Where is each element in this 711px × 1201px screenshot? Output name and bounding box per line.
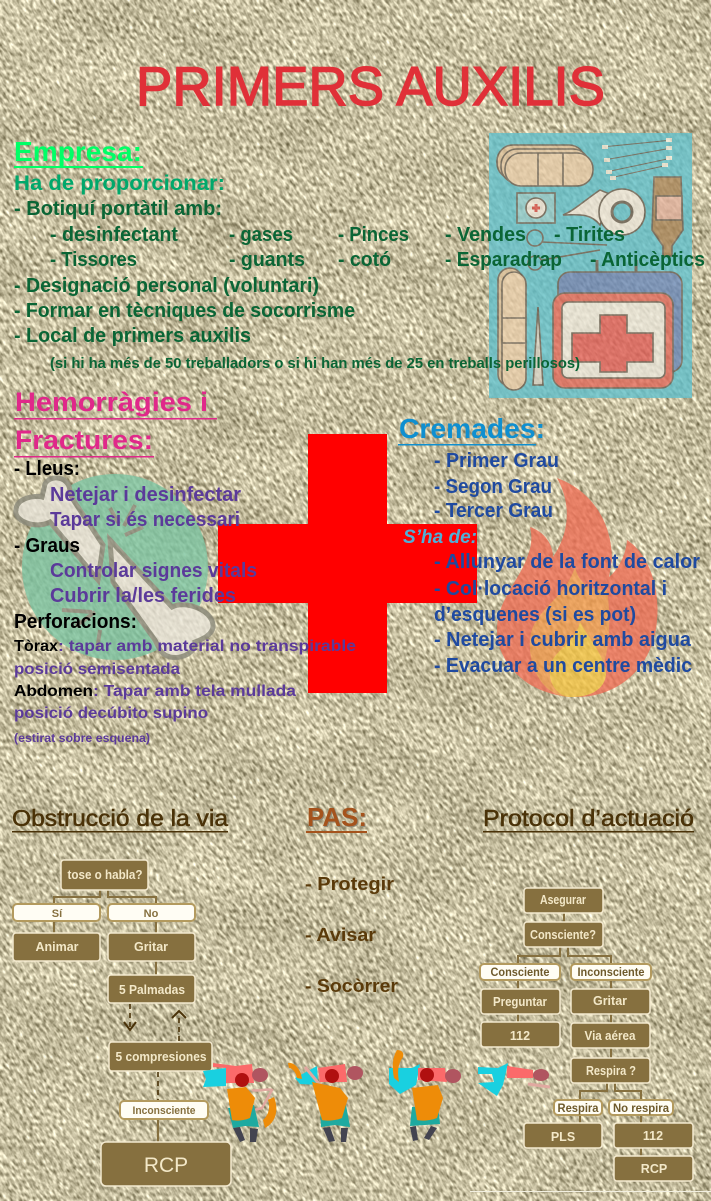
text: graus: Cubrir la/les ferides <box>50 585 236 607</box>
list: requirements: - Designació personal (voluntari) <box>14 275 319 297</box>
text: graus <box>14 535 257 607</box>
heading: pas: PAS: <box>307 802 367 832</box>
list: actuacions: d’esquenes (si es pot) <box>434 604 636 626</box>
list: graus de cremada: - Segon Grau <box>434 476 552 498</box>
list: pas steps: - Socòrrer <box>305 976 398 996</box>
heading: obstrucció de la via: Obstrucció de la via <box>12 805 228 831</box>
flowchart: obstrucció: Inconsciente <box>132 1105 196 1117</box>
flowchart: obstrucció: Sí <box>52 908 63 920</box>
heading: hemorràgies i fractures <box>14 387 217 458</box>
list: requirements: - Vendes <box>445 224 526 246</box>
list: pas steps: - Avisar <box>305 925 376 945</box>
heading: hemorràgies i fractures: Hemorràgies i <box>15 387 208 417</box>
list: requirements: - Anticèptics <box>590 249 705 271</box>
flowchart: protocol d'actuació: RCP <box>641 1162 667 1176</box>
illustration: recovery position sequence <box>203 1050 550 1142</box>
flowchart: protocol d'actuació: Respira <box>558 1101 599 1115</box>
subheading: ha de proporcionar: Ha de proporcionar: <box>14 172 225 195</box>
flowchart: protocol d'actuació: Asegurar <box>540 893 586 907</box>
heading: hemorràgies i fractures: Fractures: <box>15 425 153 455</box>
text: perforacions: : tapar amb material no transpirable <box>58 638 356 655</box>
flowchart: obstrucció: Animar <box>35 940 79 954</box>
flowchart: protocol d'actuació: 112 <box>510 1029 530 1043</box>
flowchart: obstrucció: 5 compresiones <box>116 1050 207 1064</box>
text: perforacions: Tòrax <box>14 638 58 655</box>
text: perforacions: posició semisentada <box>14 661 180 678</box>
illustration: red cross <box>218 434 477 693</box>
heading: pas: PAS: <box>308 803 368 833</box>
flowchart: protocol d'actuació <box>480 888 693 1181</box>
list: pas steps: - Protegir <box>305 874 394 894</box>
list: actuacions <box>434 551 700 677</box>
figure: step 3 <box>389 1050 461 1141</box>
flowchart: obstrucció: RCP <box>144 1154 188 1177</box>
flowchart: protocol d'actuació: Inconsciente <box>578 965 645 979</box>
flowchart: protocol d'actuació: Consciente? <box>530 928 596 942</box>
list: requirements: - guants <box>229 249 305 271</box>
panel: cremades <box>398 413 700 677</box>
text: lleus: Tapar si és necessari <box>50 509 240 531</box>
text: perforacions: posició decúbito supino <box>14 705 208 722</box>
list: requirements: - Local de primers auxilis <box>14 325 251 347</box>
list: requirements: - Tissores <box>50 249 137 271</box>
list: requirements: - desinfectant <box>50 224 178 246</box>
list: actuacions: - Col·locació horitzontal i <box>434 578 667 600</box>
text: perforacions <box>14 611 356 745</box>
subheading: s'ha de: S’ha de: <box>403 527 477 548</box>
list: actuacions: - Evacuar a un centre mèdic <box>434 655 692 677</box>
heading: empresa: Empresa: <box>14 136 142 167</box>
flowchart: protocol d'actuació: Preguntar <box>493 995 547 1009</box>
text: lleus <box>14 458 241 531</box>
heading: protocol d'actuació: Protocol d’actuació <box>483 805 694 831</box>
heading: cremades: Cremades: <box>399 413 545 444</box>
illustration: flame <box>497 478 658 697</box>
list: requirements: - Esparadrap <box>445 249 562 271</box>
text: perforacions: Perforacions: <box>14 611 137 633</box>
panel: hemorràgies i fractures <box>14 387 356 745</box>
flowchart: protocol d'actuació: Respira ? <box>586 1064 636 1078</box>
list: requirements: - Botiquí portàtil amb: <box>14 198 222 220</box>
list: graus de cremada <box>434 450 559 522</box>
text: lleus: - Lleus: <box>14 458 80 480</box>
list: requirements: - cotó <box>338 249 391 271</box>
text: graus: - Graus <box>14 535 80 557</box>
text: lleus: Netejar i desinfectar <box>50 484 241 506</box>
title: PRIMERS AUXILIS <box>136 55 605 117</box>
flowchart: obstrucció <box>13 860 231 1186</box>
list: requirements: - Tirites <box>554 224 625 246</box>
list: pas steps <box>305 874 398 996</box>
figure: step 1 <box>203 1063 276 1142</box>
flowchart: obstrucció: No <box>144 908 159 920</box>
list: actuacions: - Allunyar de la font de calor <box>434 551 700 573</box>
flowchart: protocol d'actuació: Via aérea <box>584 1029 636 1043</box>
panel: empresa <box>14 136 705 372</box>
illustration: first aid kit <box>489 133 692 398</box>
list: requirements: - gases <box>229 224 293 246</box>
flowchart: obstrucció: tose o habla? <box>68 868 142 882</box>
flowchart: protocol d'actuació: PLS <box>551 1130 575 1144</box>
flowchart: protocol d'actuació: 112 <box>643 1129 663 1143</box>
list: graus de cremada: - Primer Grau <box>434 450 559 472</box>
text: graus: Controlar signes vitals <box>50 560 257 582</box>
text: perforacions: : Tapar amb tela mullada <box>93 683 296 700</box>
list: requirements <box>14 198 705 372</box>
figure: step 2 <box>288 1063 363 1142</box>
divider line at bottom <box>470 1191 711 1192</box>
text: perforacions: Abdomen <box>14 683 93 700</box>
list: requirements: (si hi ha més de 50 treballadors o si hi han més de 25 en treballs perillosos) <box>50 355 580 372</box>
flowchart: obstrucció: Gritar <box>134 940 168 954</box>
flowchart: protocol d'actuació: Gritar <box>593 994 627 1008</box>
flowchart: obstrucció: 5 Palmadas <box>119 983 185 997</box>
list: requirements: - Formar en tècniques de socorrisme <box>14 300 355 322</box>
figure: step 4 <box>478 1063 550 1096</box>
flowchart: protocol d'actuació: No respira <box>613 1101 669 1115</box>
flowchart: protocol d'actuació: Consciente <box>490 965 550 979</box>
text: perforacions: (estirat sobre esquena) <box>14 731 150 745</box>
illustration: broken bone <box>16 474 213 660</box>
list: actuacions: - Netejar i cubrir amb aigua <box>434 629 692 651</box>
list: requirements: - Pinces <box>338 224 409 246</box>
list: graus de cremada: - Tercer Grau <box>434 500 553 522</box>
